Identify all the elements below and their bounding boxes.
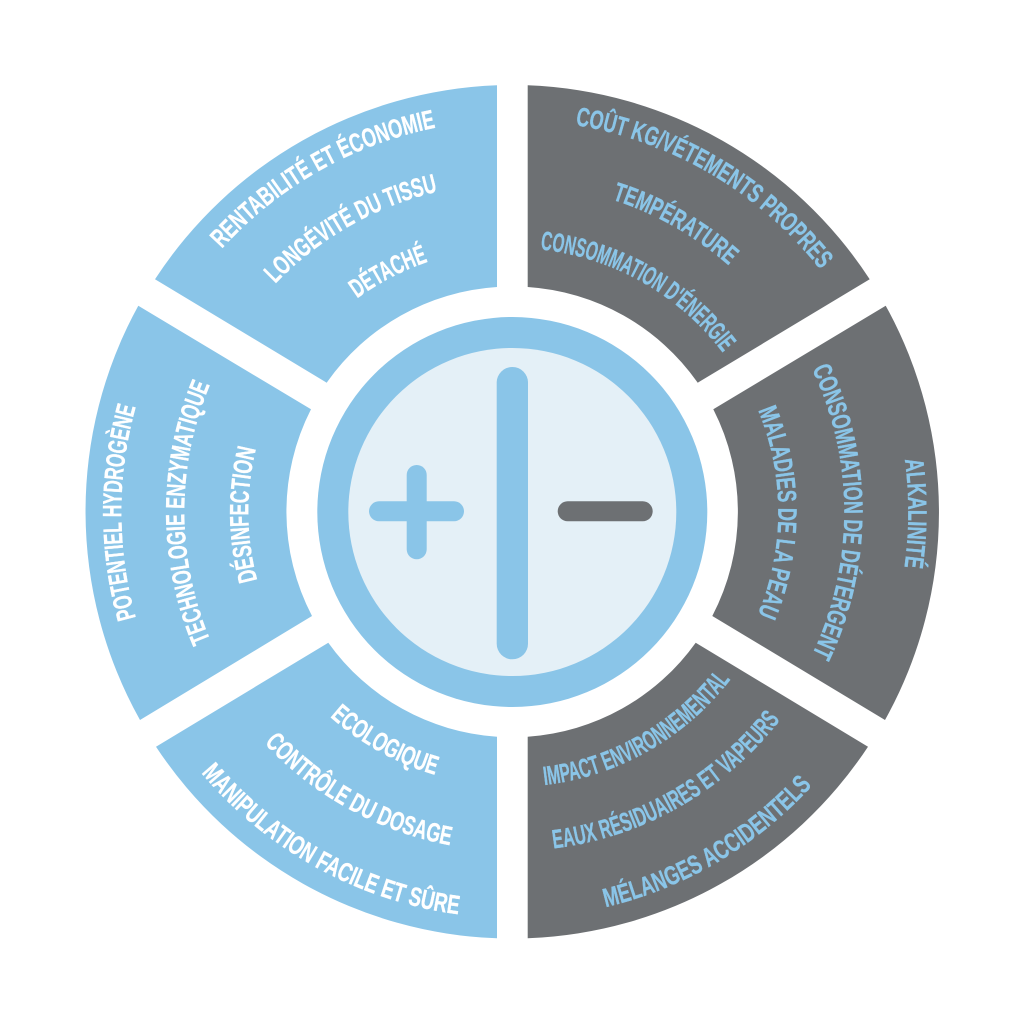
panel: left benefits: [86, 306, 312, 720]
panel: top-right drawbacks: [528, 85, 870, 383]
icon: minus sign: [558, 501, 653, 521]
sector: top-right: [528, 85, 870, 383]
sector: bottom-right: [528, 643, 868, 938]
label: impact environnemental: IMPACT ENVIRONNEMENTAL: [543, 672, 730, 786]
label: maladies de la peau: MALADIES DE LA PEAU: [758, 404, 797, 620]
label: température: TEMPÉRATURE: [616, 182, 740, 266]
label: technologie enzymatique: TECHNOLOGIE ENZYMATIQUE: [166, 379, 210, 648]
icon: plus sign: [369, 465, 464, 559]
label: alkalinité: ALKALINITÉ: [904, 460, 929, 569]
label: consommation d'énergie: CONSOMMATION D'ÉNERGIE: [542, 232, 737, 352]
label: consommation de détergent: CONSOMMATION DE DÉTERGENT: [814, 364, 863, 662]
vertical divider bar: [497, 367, 528, 659]
central plus/minus badge: [317, 317, 707, 707]
label: eaux résiduaires et vapeurs: EAUX RÉSIDUAIRES ET VAPEURS: [552, 710, 778, 848]
sector: bottom-left: [156, 643, 497, 938]
label: coût kg/vêtements propres: COÛT KG/VÉTEMENTS PROPRES: [577, 108, 832, 268]
badge inner disc: [348, 348, 676, 676]
label: ecologique: ECOLOGIQUE: [330, 703, 440, 775]
label: désinfection: DÉSINFECTION: [229, 446, 258, 584]
label: contrôle du dosage: CONTRÔLE DU DOSAGE: [267, 733, 453, 846]
panel: bottom-left benefits: [156, 642, 497, 938]
label: longévité du tissu: LONGÉVITÉ DU TISSU: [262, 174, 436, 284]
label: mélanges accidentels: MÉLANGES ACCIDENTELS: [602, 776, 810, 908]
label: potentiel hydrogène: POTENTIEL HYDROGÈNE: [102, 403, 136, 622]
sector: top-left: [155, 85, 497, 383]
label: rentabilité et économie: RENTABILITÉ ET ÉCONOMIE: [209, 110, 436, 248]
label: détaché: DÉTACHÉ: [347, 240, 428, 298]
panel: top-left benefits: [155, 85, 497, 383]
sector: right: [712, 306, 939, 720]
panel: bottom-right drawbacks: [528, 642, 868, 938]
badge outer ring: [317, 317, 707, 707]
sector: left: [86, 306, 312, 720]
panel: right drawbacks: [712, 306, 939, 720]
label: manipulation facile et sûre: MANIPULATION FACILE ET SÛRE: [202, 762, 460, 914]
